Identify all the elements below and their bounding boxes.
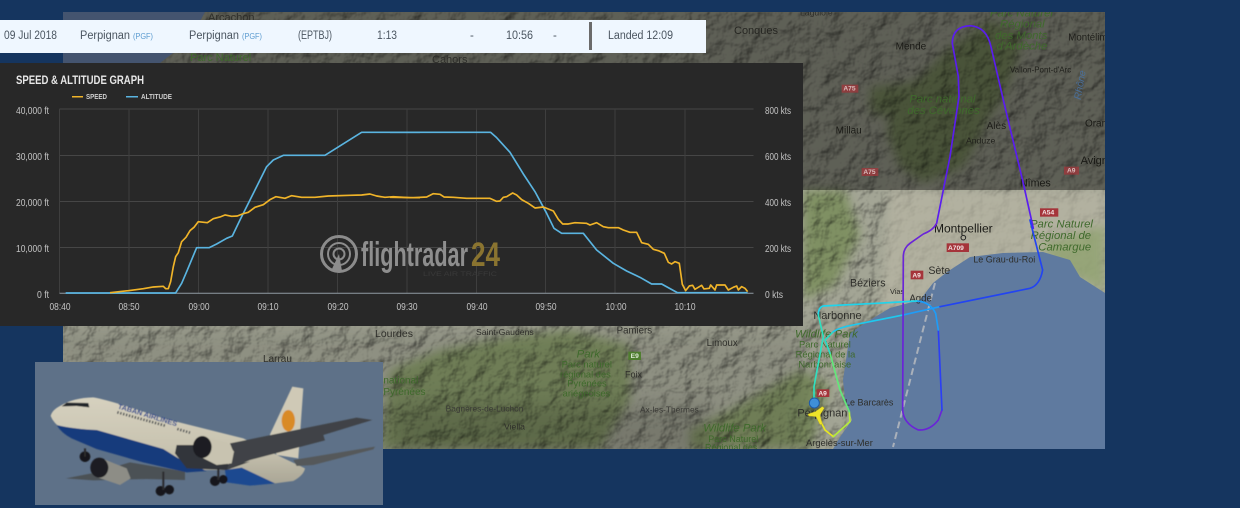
left axis labels: 30,000 ft: [16, 151, 49, 163]
map panel: [50, 8, 1120, 466]
map labels: coast: Wildlife Park: [795, 328, 859, 340]
time axis labels: 09:00: [188, 301, 210, 313]
left axis labels: [16, 105, 49, 301]
right axis labels: 0 kts: [765, 289, 783, 301]
flight details table: -: [470, 30, 474, 42]
map labels: coast: Narbonnaise: [798, 359, 851, 369]
map labels: Cevennes: Alès: [987, 121, 1006, 132]
photo: tail logo: [282, 410, 295, 431]
map labels: Pyrenees: Pamiers: [617, 325, 652, 336]
photo: cockpit windows: [62, 403, 89, 407]
map labels: Pyrenees: E9: [631, 353, 639, 360]
map labels: Pyrenees: ariégeoises: [563, 389, 611, 399]
map labels: Pyrenees: Régional des: [705, 443, 758, 453]
map labels: west: Larrau: [263, 354, 292, 365]
left axis labels: 20,000 ft: [16, 197, 49, 209]
map labels: Cevennes: Rhône: [1073, 69, 1089, 101]
left axis labels: 40,000 ft: [16, 105, 49, 117]
map labels: Pyrenees: Pyrénées: [567, 379, 607, 389]
altitude line, first half: [66, 132, 420, 293]
map labels: coast: A9: [912, 272, 921, 279]
map labels: Cevennes: Vallon-Pont-d'Arc: [1010, 65, 1071, 74]
map labels: coast: A709: [948, 245, 964, 252]
map labels: west: [190, 12, 779, 365]
photo: near engine intake: [193, 436, 212, 458]
flightradar24 watermark: LIVE AIR TRAFFIC: [423, 272, 498, 278]
map labels: coast: Vias: [890, 287, 904, 296]
map labels: Cevennes: des Cévennes: [907, 105, 980, 117]
map labels: Pyrenees: Parc naturel: [562, 360, 612, 370]
legend: SPEED: [86, 94, 107, 101]
map labels: coast: [795, 218, 1093, 448]
map labels: coast: Narbonne: [813, 310, 862, 322]
flight details table: Perpignan: [80, 30, 130, 42]
speed line, second half: [390, 193, 748, 292]
right axis labels: 400 kts: [765, 197, 791, 209]
map labels: west: Lourdes: [375, 328, 413, 340]
map labels: coast: Le Grau-du-Roi: [973, 254, 1035, 264]
map labels: coast: Camargue: [1038, 242, 1091, 254]
map: Camargue wetlands: [1040, 225, 1105, 292]
right axis labels: 200 kts: [765, 243, 791, 255]
photo: near engine: [200, 437, 234, 465]
right axis labels: 800 kts: [765, 105, 791, 117]
photo: landing gear: [80, 448, 228, 496]
map labels: coast: Sète: [928, 265, 950, 277]
flight details table: 09 Jul 2018: [4, 30, 57, 42]
map labels: Cevennes: Millau: [836, 125, 862, 136]
map labels: Cevennes: Parc Naturel: [990, 8, 1053, 20]
map: shipping lane: [893, 283, 935, 447]
map labels: Cevennes: Orange: [1085, 119, 1119, 130]
map labels: Cevennes: d'Ardèche: [997, 40, 1047, 52]
map labels: Cevennes: Avignon: [1081, 155, 1120, 167]
map labels: coast: Régional de: [1031, 230, 1091, 242]
map labels: Pyrenees: Limoux: [707, 338, 738, 349]
map labels: coast: Argelès-sur-Mer: [806, 438, 873, 448]
map: Bay of Biscay: [63, 12, 205, 63]
map: light lowland patch: [880, 190, 1105, 310]
time axis labels: 09:50: [536, 301, 557, 313]
left axis labels: 0 ft: [37, 289, 49, 301]
map labels: Pyrenees: Wildlife Park: [703, 423, 767, 435]
flightradar24 watermark: 24: [471, 236, 500, 274]
map labels: Pyrenees: [383, 325, 767, 453]
map labels: Cevennes: A54: [1042, 210, 1054, 217]
map labels: Pyrenees: national: [383, 375, 418, 386]
map labels: coast: Parc Naturel: [1030, 218, 1093, 230]
time axis labels: 08:50: [118, 301, 140, 313]
flight details table: (PGF): [133, 31, 153, 41]
icon: aircraft marker: [808, 407, 824, 425]
photo: tailplane: [293, 447, 375, 466]
time axis labels: 10:10: [674, 301, 696, 313]
map labels: Cevennes: Régional: [1000, 18, 1045, 30]
photo: cabin windows: [117, 412, 190, 433]
map labels: Pyrenees: Ax-les-Thermes: [640, 404, 699, 414]
time axis labels: 09:10: [258, 301, 279, 313]
map labels: Cevennes: Montélimar: [1068, 33, 1117, 44]
flight details table: [0, 20, 706, 53]
map labels: coast: Béziers: [850, 278, 886, 290]
map labels: coast: Régional de la: [796, 350, 856, 360]
photo: near wing: [227, 418, 372, 470]
map labels: west: Conques: [734, 25, 779, 37]
map labels: Pyrenees: Pyrénées: [383, 387, 426, 398]
photo: airline name: TABAN AIRLINES: [117, 404, 178, 428]
speed line, first half: [110, 194, 420, 293]
time axis labels: 09:20: [328, 301, 349, 313]
map labels: west: Arcachon: [208, 12, 254, 24]
map labels: Cevennes: A9: [1067, 168, 1076, 175]
flight details table: (PGF): [242, 31, 262, 41]
map labels: Pyrenees: Saint-Gaudens: [476, 327, 534, 337]
map labels: Cevennes: Parc national: [909, 94, 976, 106]
map labels: coast: Agde: [909, 294, 932, 305]
time axis labels: [50, 301, 696, 313]
flight details table: 1:13: [377, 30, 397, 42]
map labels: Cevennes: Mende: [896, 41, 927, 52]
time axis labels: 09:30: [396, 301, 418, 313]
right axis labels: 600 kts: [765, 151, 791, 163]
map: dark overlay band: [63, 12, 1105, 190]
photo: far wing: [66, 462, 185, 480]
map labels: Pyrenees: Bagnères-de-Luchon: [446, 404, 524, 414]
flight details table: 10:56: [506, 30, 533, 42]
route: northern section over the Cevennes: [937, 26, 1033, 228]
flightradar24 watermark: flightradar: [361, 236, 468, 274]
map labels: Pyrenees: Park: [577, 348, 601, 360]
flight details table: (EPTBJ): [298, 30, 332, 42]
photo: fuselage: [51, 397, 305, 483]
photo: far engine intake: [90, 458, 108, 478]
photo: wing root shadow: [175, 445, 250, 470]
photo: rear blue stripe: [225, 468, 275, 486]
flight details table: -: [553, 30, 557, 42]
map labels: Cevennes: Anduze: [966, 135, 996, 145]
left axis labels: 10,000 ft: [16, 243, 49, 255]
flight route: [808, 26, 1043, 437]
map labels: coast: Perpignan: [797, 408, 847, 420]
map labels: Pyrenees: Foix: [625, 369, 642, 379]
map: forested park areas: [380, 20, 1023, 449]
speed and altitude graph panel: [0, 63, 803, 326]
flight details table: Landed 12:09: [608, 30, 673, 42]
legend: ALTITUDE: [141, 94, 172, 101]
map labels: Pyrenees: régional des: [560, 369, 611, 379]
map labels: Pyrenees: Viella: [504, 421, 525, 431]
map labels: Cevennes: [800, 8, 1120, 217]
map labels: coast: A9: [818, 391, 827, 398]
map labels: Cevennes: Nîmes: [1020, 178, 1051, 190]
map labels: Cevennes: A75: [863, 169, 876, 176]
photo: far engine: [98, 458, 131, 485]
map labels: Cevennes: des Monts: [995, 30, 1048, 42]
map labels: Cevennes: A75: [843, 86, 856, 93]
time axis labels: 08:40: [50, 301, 71, 313]
icon: Perpignan airport marker: [809, 398, 819, 408]
map labels: Pyrenees: Parc Naturel: [708, 434, 758, 444]
flightradar24 watermark: [322, 236, 500, 278]
map labels: coast: Parc Naturel: [799, 340, 851, 350]
time axis labels: 09:40: [466, 301, 488, 313]
map labels: west: Cahors: [432, 54, 468, 66]
right axis labels: [765, 105, 791, 301]
map labels: Cevennes: Laguiole: [800, 8, 833, 18]
aircraft photo: [35, 362, 383, 505]
map: darker mountain shading: [63, 326, 812, 449]
legend: [72, 94, 172, 101]
altitude line, second half: [390, 132, 748, 293]
graph title: SPEED & ALTITUDE GRAPH: [16, 73, 144, 87]
time axis labels: 10:00: [606, 301, 627, 313]
map: Mediterranean sea: [833, 252, 1105, 449]
flight details table: Perpignan: [189, 30, 239, 42]
route: southern section along the coast: [808, 220, 1043, 437]
map labels: coast: Le Barcarès: [845, 397, 894, 407]
photo: tail fin: [270, 387, 303, 458]
map labels: west: Parc Naturel: [190, 52, 251, 64]
map labels: coast: Montpellier: [934, 221, 993, 235]
photo: blue belly stripe: [57, 425, 207, 472]
